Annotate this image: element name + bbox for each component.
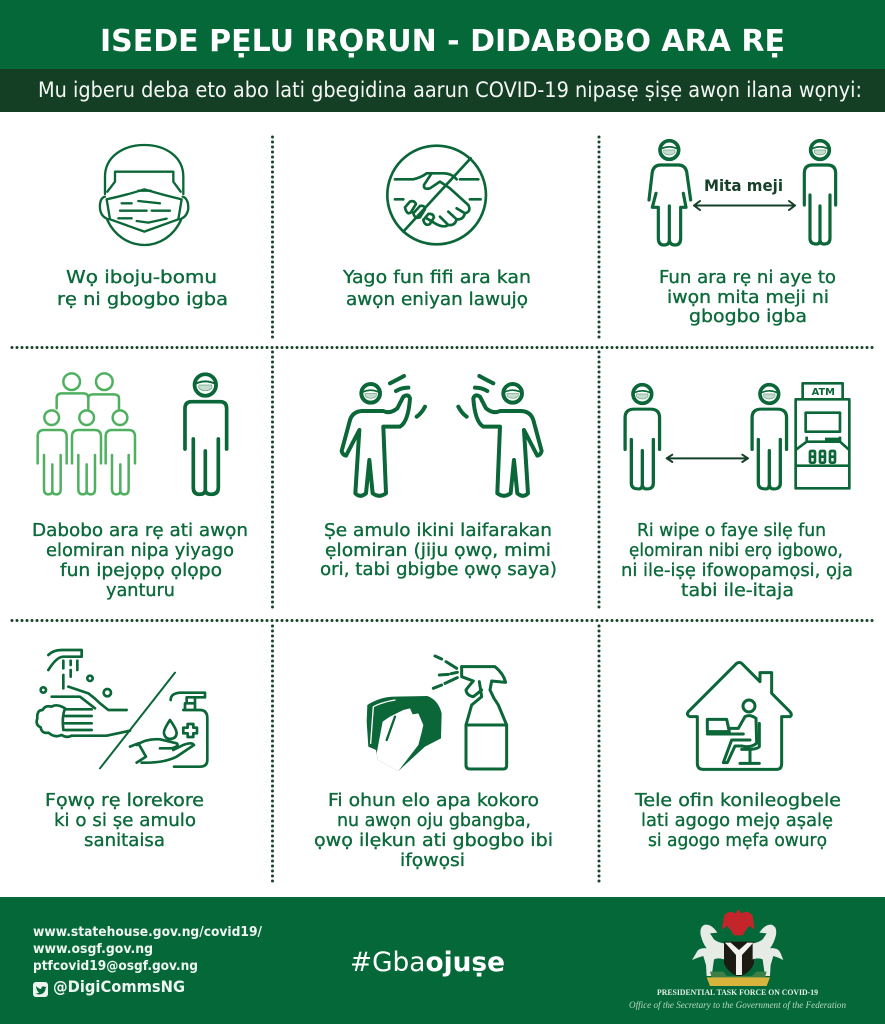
footer band xyxy=(0,897,885,1024)
caption: Wọ iboju-bomu xyxy=(66,267,217,288)
icon: masked person alone xyxy=(185,374,227,494)
caption: ifọwọsi xyxy=(400,850,465,871)
icon: waving people xyxy=(342,376,542,496)
caption: nu awọn oju gbangba, xyxy=(337,810,531,831)
office name: Office of the Secretary to the Government of the Federation xyxy=(629,1000,846,1011)
header band xyxy=(0,0,885,69)
caption: ọwọ ilẹkun ati gbogbo ibi xyxy=(314,830,553,851)
horses xyxy=(692,925,724,976)
caption: Fọwọ rẹ lorekore xyxy=(45,790,204,811)
caption: ẹlomiran nibi erọ igbowo, xyxy=(629,540,843,561)
caption xyxy=(342,267,531,310)
caption xyxy=(314,790,553,871)
caption: ẹlomiran (jiju ọwọ, mimi xyxy=(325,540,551,561)
caption: ki o si ṣe amulo xyxy=(54,810,196,831)
contact links: www.osgf.gov.ng xyxy=(33,941,153,957)
caption: elomiran nipa yiyago xyxy=(46,540,234,561)
caption: Ṣe amulo ikini laifarakan xyxy=(324,520,552,541)
caption: gbogbo igba xyxy=(689,306,807,327)
task force name: PRESIDENTIAL TASK FORCE ON COVID-19 xyxy=(657,987,818,997)
arrow: two metre distance xyxy=(694,201,795,210)
label: two metres: Mita meji xyxy=(704,176,783,195)
panel: avoid crowds xyxy=(32,373,248,601)
caption: lati agogo mejọ aṣalẹ xyxy=(641,810,833,831)
icon: two people and ATM: ATM xyxy=(812,387,835,398)
title: ISEDE PẸLU IRỌRUN - DIDABOBO ARA RẸ xyxy=(100,24,785,59)
caption: Tele ofin konileogbele xyxy=(634,790,841,811)
icon: hand washing and sanitiser xyxy=(37,650,207,768)
caption: Ri wipe o faye silẹ fun xyxy=(637,520,826,541)
motto banner xyxy=(707,977,770,986)
caption: iwọn mita meji ni xyxy=(667,287,829,308)
icon: cloth and spray bottle xyxy=(367,656,507,771)
twitter handle: @DigiCommsNG xyxy=(53,977,185,996)
caption: ni ile-iṣẹ ifowopamọsi, ọja xyxy=(621,560,853,581)
hashtag: #Gbaojuṣe xyxy=(350,947,505,978)
contact links: ptfcovid19@osgf.gov.ng xyxy=(33,958,198,974)
icon: masked face xyxy=(100,145,188,245)
caption: awọn eniyan lawujọ xyxy=(346,289,528,310)
shield xyxy=(724,942,754,977)
caption xyxy=(57,267,228,310)
contact links: www.statehouse.gov.ng/covid19/ xyxy=(33,924,262,940)
panel: no handshake xyxy=(342,146,531,310)
icon: crowd of people xyxy=(38,373,135,494)
icon: person working at home xyxy=(687,662,791,769)
panel: disinfect surfaces xyxy=(314,656,553,871)
caption: si agogo mẹfa owurọ xyxy=(648,830,827,851)
caption xyxy=(32,520,248,601)
caption: Dabobo ara rẹ ati awọn xyxy=(32,520,248,541)
panel: face mask xyxy=(57,145,228,310)
icon: two people and ATM xyxy=(625,383,849,489)
icon: woman xyxy=(649,141,691,245)
caption: ori, tabi gbigbe ọwọ saya) xyxy=(320,559,557,580)
caption xyxy=(45,790,204,851)
caption: fun ipejọpọ ọlọpo xyxy=(60,560,222,581)
caption xyxy=(634,790,841,851)
caption xyxy=(320,520,557,580)
icon: crossed out handshake xyxy=(387,146,486,244)
panel: two metres distance xyxy=(649,141,836,327)
caption: sanitaisa xyxy=(84,830,165,851)
caption: rẹ ni gbogbo igba xyxy=(57,289,228,310)
icon: man xyxy=(804,141,836,244)
panel: leave space at ATM xyxy=(621,383,853,601)
caption xyxy=(659,267,836,327)
eagle xyxy=(722,909,755,935)
caption: yanturu xyxy=(106,580,175,601)
caption: tabi ile-itaja xyxy=(681,580,794,601)
panel: wash hands xyxy=(37,650,207,851)
flowers and ground xyxy=(710,972,767,977)
caption xyxy=(621,520,853,601)
caption: Fun ara rẹ ni aye to xyxy=(659,267,836,288)
panel: curfew at home xyxy=(634,662,841,851)
caption: Fi ohun elo apa kokoro xyxy=(328,790,539,811)
panel: non-contact greeting xyxy=(320,376,557,580)
caption: Yago fun fifi ara kan xyxy=(342,267,531,288)
coat of arms xyxy=(692,909,783,986)
subtitle band xyxy=(0,69,885,112)
contact links xyxy=(33,924,262,974)
icon: twitter xyxy=(33,982,48,997)
